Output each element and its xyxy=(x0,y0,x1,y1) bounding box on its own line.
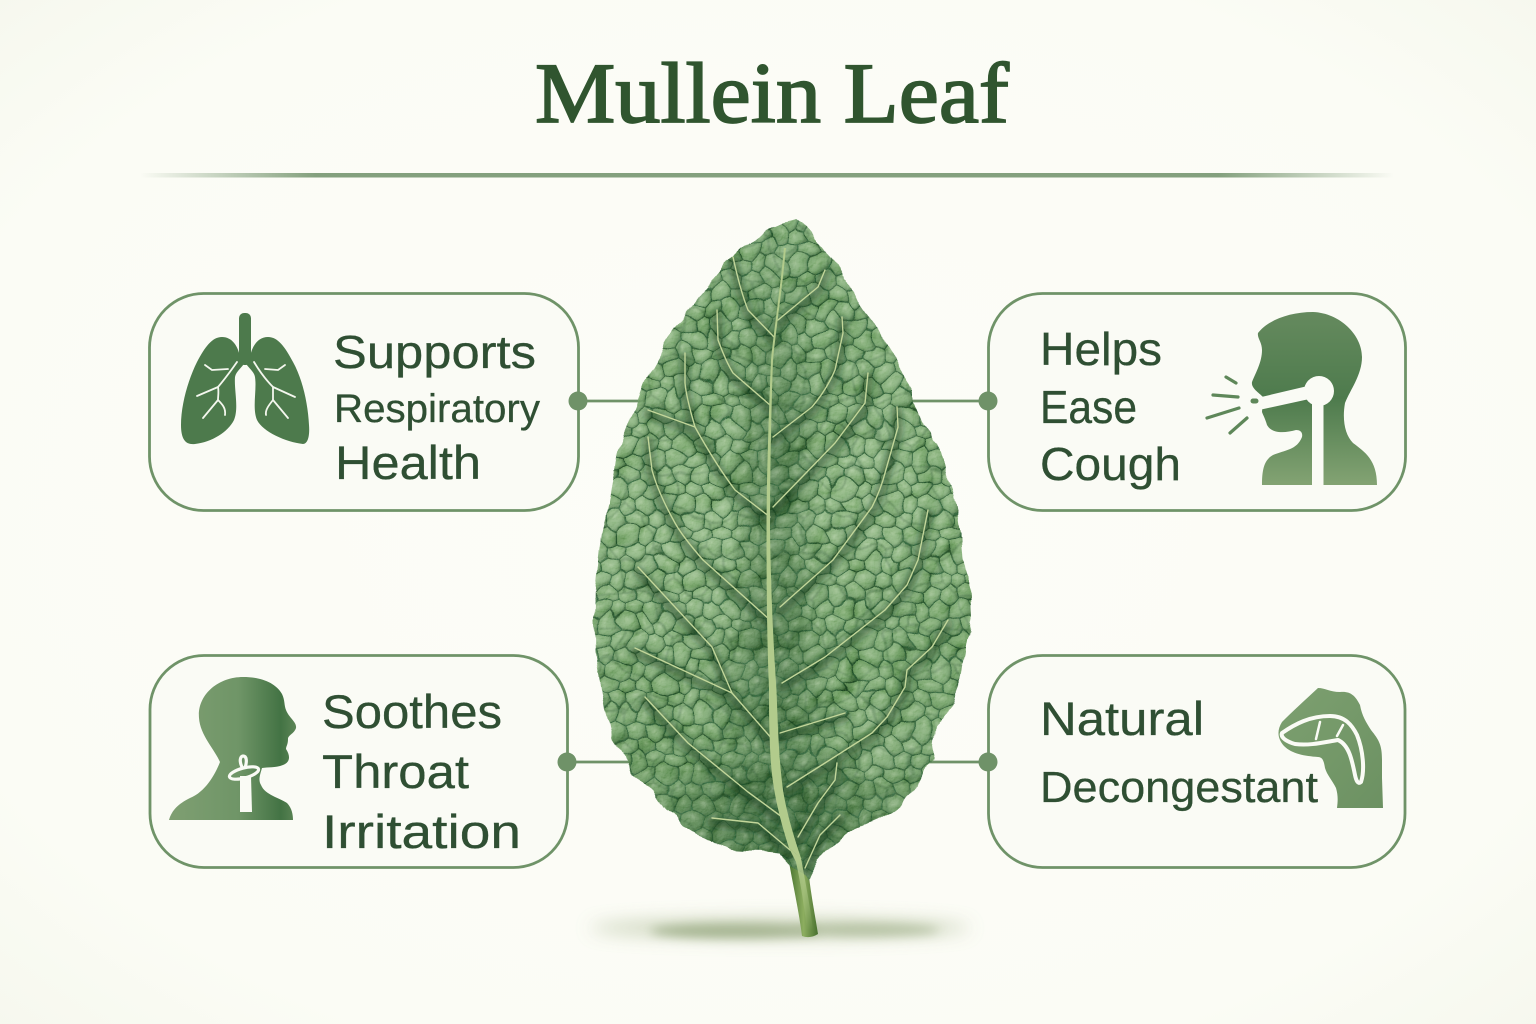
panel: supports respiratory health xyxy=(150,294,588,510)
connector dot xyxy=(568,392,588,410)
label: Throat xyxy=(322,745,469,798)
label: Cough xyxy=(1040,438,1181,490)
connector dot xyxy=(978,392,998,410)
side veins xyxy=(635,257,948,868)
title divider rule xyxy=(140,173,1394,178)
ground shadow xyxy=(590,919,970,938)
label: Respiratory xyxy=(334,387,540,431)
connector dot xyxy=(978,752,998,772)
label: Supports xyxy=(333,326,536,378)
leaf stem xyxy=(789,862,818,937)
label xyxy=(1040,323,1181,490)
label: Ease xyxy=(1040,381,1137,433)
icon: head with throat xyxy=(169,677,296,820)
connector lines xyxy=(567,401,988,762)
mullein leaf illustration xyxy=(592,219,972,938)
panel: natural decongestant xyxy=(978,656,1405,868)
panel: helps ease cough xyxy=(978,294,1406,510)
label: Irritation xyxy=(322,805,521,858)
label: Natural xyxy=(1040,692,1204,745)
icon: lungs xyxy=(181,313,309,444)
title: Mullein Leaf xyxy=(535,45,1009,141)
leaf blade xyxy=(592,219,972,880)
label: Helps xyxy=(1040,323,1162,375)
icon: person coughing xyxy=(1207,312,1377,485)
label: Decongestant xyxy=(1040,763,1318,812)
label xyxy=(322,685,521,858)
midrib fading into stem xyxy=(789,848,813,930)
connector dot xyxy=(558,752,576,772)
label: Health xyxy=(335,436,481,489)
label xyxy=(1040,692,1318,812)
panel: soothes throat irritation xyxy=(150,656,576,868)
midrib xyxy=(766,248,803,860)
vein shading xyxy=(635,261,948,872)
icon: nasal passage xyxy=(1278,688,1383,808)
label: Soothes xyxy=(322,685,502,738)
label xyxy=(333,326,540,489)
